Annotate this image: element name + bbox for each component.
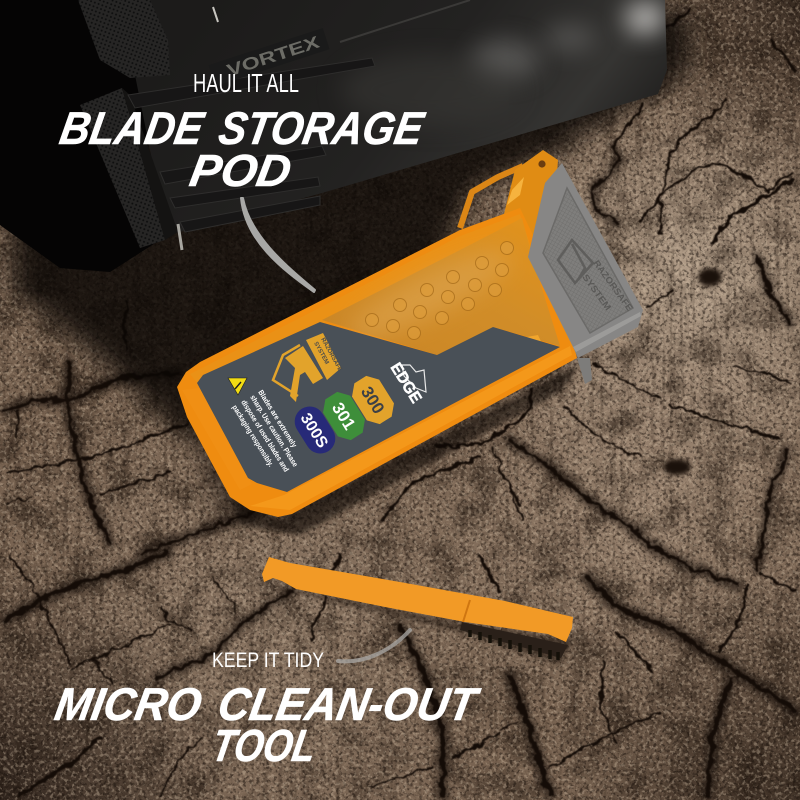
heading: blade storage pod: POD bbox=[186, 145, 295, 196]
pod gray label bbox=[197, 322, 560, 492]
warning text: sharp. Use caution. Please bbox=[248, 393, 300, 468]
wood crack shadows bbox=[5, 147, 795, 795]
callout: blade storage pod bbox=[56, 68, 429, 196]
binocular body bbox=[120, 0, 667, 232]
micro clean-out tool bbox=[262, 557, 573, 665]
gray cap bbox=[528, 163, 643, 384]
badge 301: 301 bbox=[328, 399, 359, 433]
badge 300S: 300S bbox=[297, 410, 331, 451]
wood knots bbox=[663, 268, 722, 475]
pod window dimples bbox=[366, 242, 514, 340]
pod shadow bbox=[230, 365, 580, 535]
R logo bbox=[273, 333, 343, 402]
heading: micro clean-out tool: TOOL bbox=[208, 720, 320, 771]
R logo: RAZORSAFE bbox=[319, 337, 343, 373]
badge 300 bbox=[347, 371, 399, 429]
cap R logo and text: SYSTEM bbox=[580, 272, 613, 312]
tool shadow bbox=[262, 585, 572, 665]
tool bristles bbox=[460, 622, 568, 660]
pointer stroke to pod bbox=[241, 198, 315, 292]
pod shell bbox=[177, 208, 577, 517]
pod translucent window bbox=[322, 218, 560, 355]
heading: micro clean-out tool bbox=[51, 678, 484, 771]
heading: micro clean-out tool: MICRO CLEAN-OUT bbox=[51, 678, 484, 730]
EDGE logo: EDGE bbox=[387, 360, 425, 407]
dark shadow under binoculars bbox=[12, 12, 690, 520]
cap R logo and text bbox=[558, 240, 635, 313]
binocular ridges bbox=[128, 58, 375, 232]
binocular brand plate: VORTEX bbox=[224, 32, 322, 80]
binoculars bbox=[0, 0, 667, 272]
kicker: keep it tidy: KEEP IT TIDY bbox=[212, 649, 324, 672]
tool handle bbox=[262, 557, 573, 642]
R logo: SYSTEM bbox=[312, 341, 329, 366]
pod loop handle bbox=[460, 166, 523, 228]
pointer stroke to tool bbox=[338, 630, 410, 661]
warning text bbox=[230, 388, 300, 474]
binocular brand plate bbox=[209, 28, 330, 86]
pod top tab bbox=[500, 150, 558, 260]
kicker: haul it all: HAUL IT ALL bbox=[193, 68, 299, 98]
badge 300: 300 bbox=[357, 383, 388, 417]
pod: blade storage pod bbox=[177, 150, 580, 535]
badge 301 bbox=[318, 387, 370, 445]
heading: blade storage pod: BLADE STORAGE bbox=[56, 102, 429, 154]
warning text: dispose of used blades and bbox=[239, 398, 291, 474]
warning triangle icon bbox=[228, 378, 247, 395]
warning text: Blades are extremely bbox=[256, 388, 299, 450]
binocular grip rings bbox=[78, 0, 178, 248]
badge 300S bbox=[289, 401, 341, 459]
cap R logo and text: RAZORSAFE bbox=[591, 258, 635, 313]
warning text: packaging responsibly. bbox=[230, 403, 276, 468]
callout: micro clean-out tool bbox=[51, 649, 484, 771]
heading: blade storage pod bbox=[56, 102, 429, 196]
